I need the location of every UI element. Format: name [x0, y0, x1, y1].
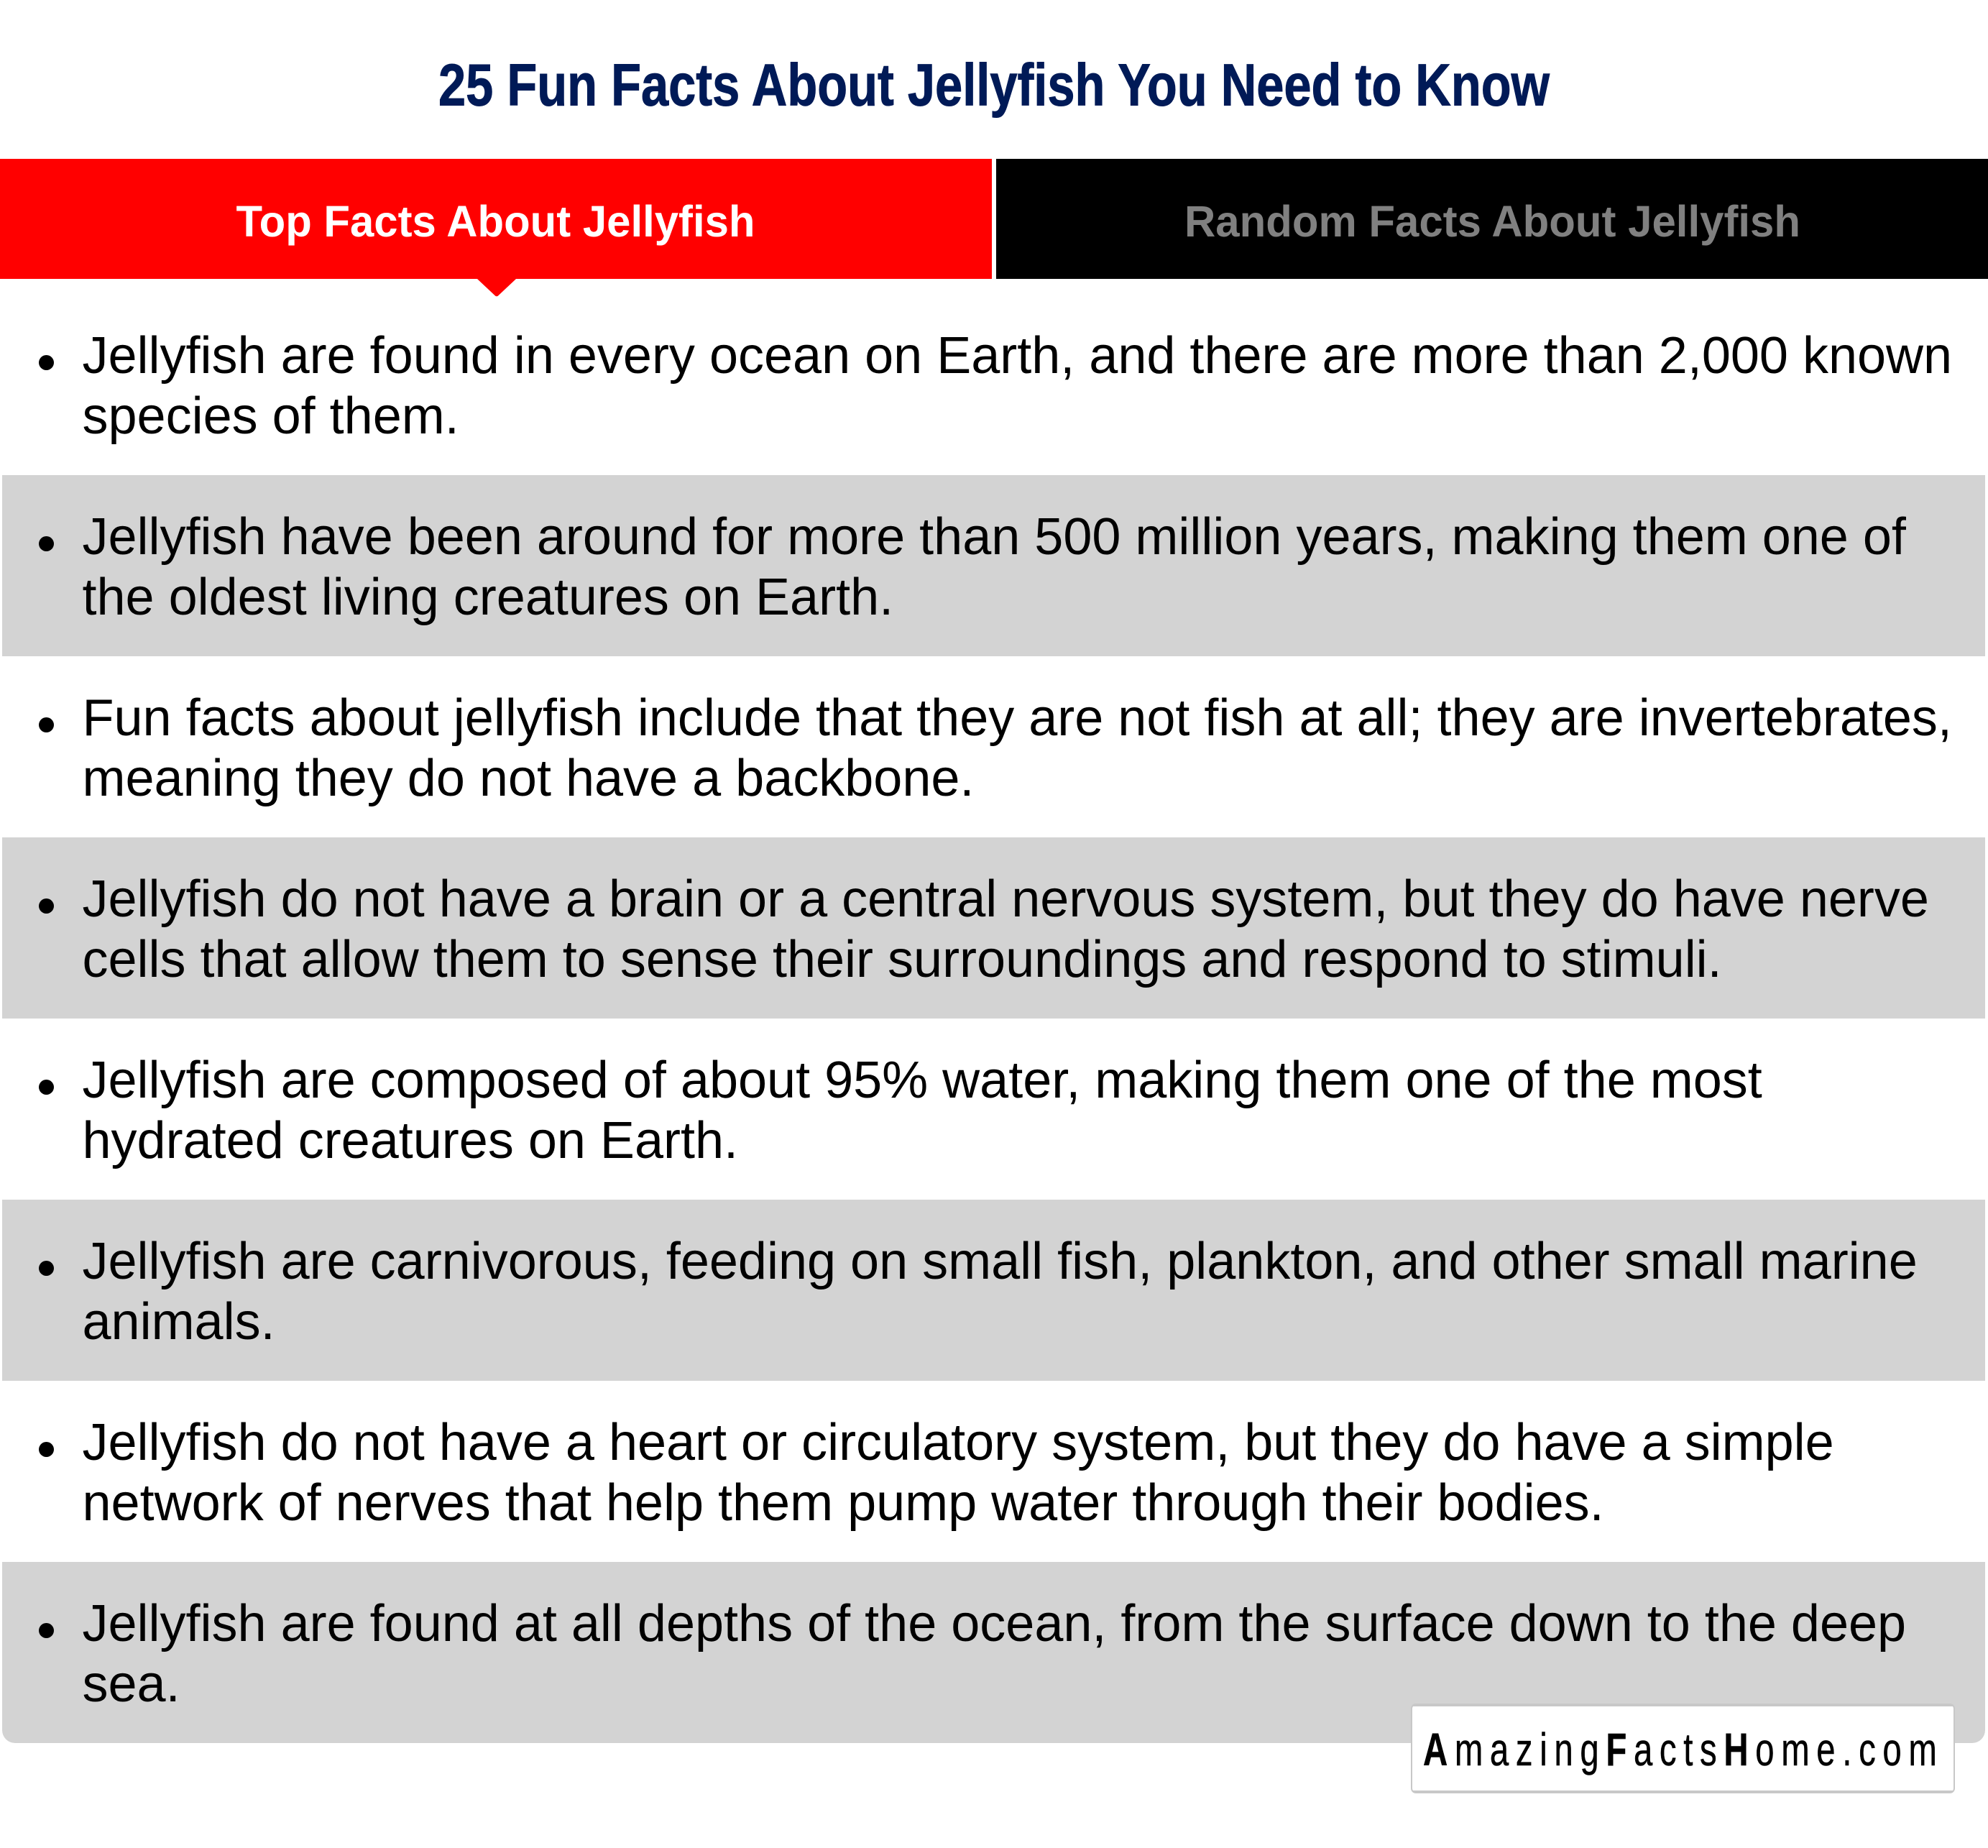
fact 3: Fun facts about jellyfish include that they are not fish at all; they are invertebrates, [82, 689, 1952, 747]
watermark logo [1411, 1704, 1955, 1793]
fact 6: Jellyfish are carnivorous, feeding on small fish, plankton, and other small marine [82, 1233, 1918, 1290]
fact 7: network of nerves that help them pump water through their bodies. [82, 1474, 1604, 1532]
fact 2 [2, 475, 1985, 656]
fact 3: meaning they do not have a backbone. [82, 750, 974, 807]
fact 8: Jellyfish are found at all depths of the ocean, from the surface down to the deep [82, 1595, 1906, 1652]
tab: top facts (active) [0, 159, 992, 296]
fact 7 [39, 1414, 1834, 1532]
fact 7: Jellyfish do not have a heart or circulatory system, but they do have a simple [82, 1414, 1834, 1471]
title: 25 Fun Facts About Jellyfish You Need to Know [438, 52, 1550, 118]
fact 2: Jellyfish have been around for more than 500 million years, making them one of [82, 508, 1906, 566]
tab: random facts (inactive) [996, 159, 1988, 279]
tab: random facts (inactive): Random Facts About Jellyfish [1184, 197, 1800, 246]
icon: active tab pointer [477, 279, 516, 296]
fact 5 [39, 1052, 1762, 1169]
fact 3 [39, 689, 1952, 807]
fact 8: sea. [82, 1655, 180, 1713]
fact 1: species of them. [82, 387, 459, 445]
fact 4 [2, 837, 1985, 1019]
fact 4: cells that allow them to sense their surroundings and respond to stimuli. [82, 931, 1722, 988]
fact 5: Jellyfish are composed of about 95% water, making them one of the most [82, 1052, 1762, 1109]
tab label: top facts: Top Facts About Jellyfish [236, 197, 755, 246]
fact 8 [2, 1562, 1985, 1743]
fact 6 [2, 1200, 1985, 1381]
fact 2: the oldest living creatures on Earth. [82, 569, 893, 626]
watermark logo: AmazingFactsHome.com [1423, 1724, 1937, 1775]
fact 4: Jellyfish do not have a brain or a central nervous system, but they do have nerve [82, 870, 1929, 928]
fact 1: Jellyfish are found in every ocean on Earth, and there are more than 2,000 known [82, 327, 1952, 385]
fact 5: hydrated creatures on Earth. [82, 1112, 738, 1169]
fact 1 [39, 327, 1952, 445]
fact 6: animals. [82, 1293, 275, 1351]
